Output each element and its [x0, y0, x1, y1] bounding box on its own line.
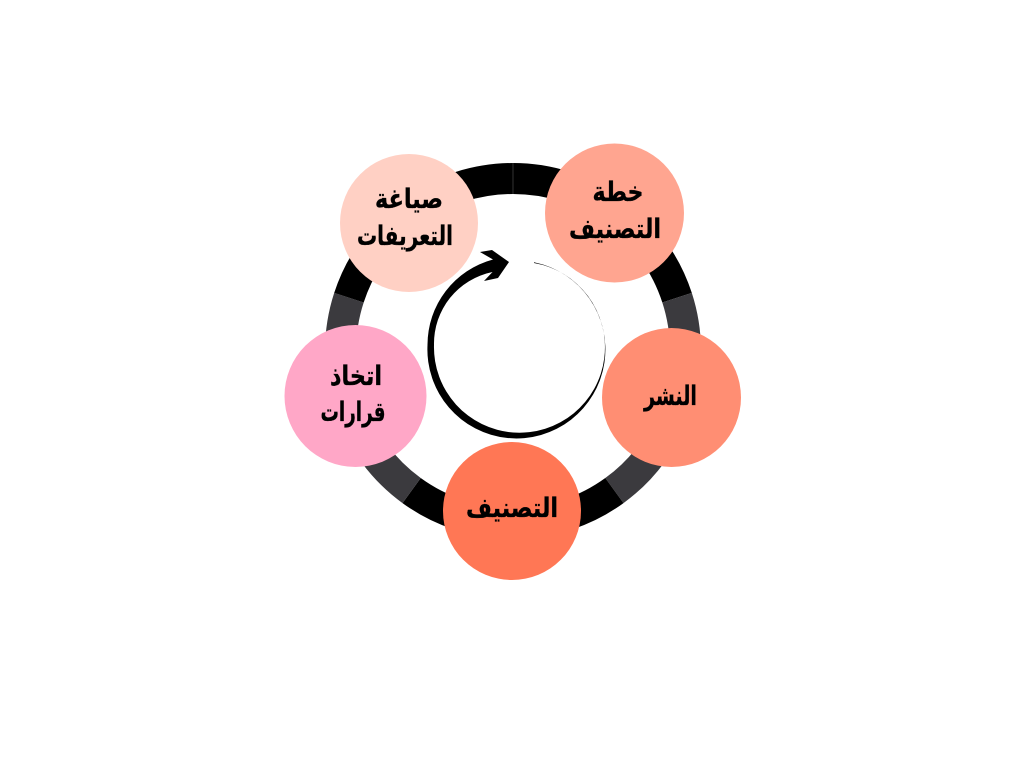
label: decision making: اتخاذ: [330, 361, 382, 392]
label: classification plan: خطة: [592, 177, 644, 208]
node: classification: [443, 442, 581, 580]
label: decision making: [320, 361, 386, 428]
circular arrow: [427, 250, 605, 438]
ring segment: top right: [513, 178, 677, 298]
node: decision making: [284, 325, 426, 467]
ring segment: top left: [349, 178, 513, 298]
node: publishing: [602, 328, 741, 467]
label: formulate definitions: صياغة: [375, 184, 443, 215]
node: formulate definitions: [340, 154, 478, 292]
ring segment: right: [614, 298, 685, 491]
label: classification plan: [569, 177, 661, 245]
label: publishing: النشر: [643, 381, 697, 412]
label: decision making: قرارات: [320, 397, 386, 428]
label: classification plan: التصنيف: [569, 214, 661, 245]
ring segment: left: [341, 298, 412, 491]
label: formulate definitions: التعريفات: [357, 221, 453, 252]
node: classification plan: [545, 144, 684, 282]
label: formulate definitions: [357, 184, 453, 252]
outer ring: [341, 178, 685, 523]
label: classification: التصنيف: [466, 493, 558, 524]
ring segment: bottom: [412, 491, 614, 523]
